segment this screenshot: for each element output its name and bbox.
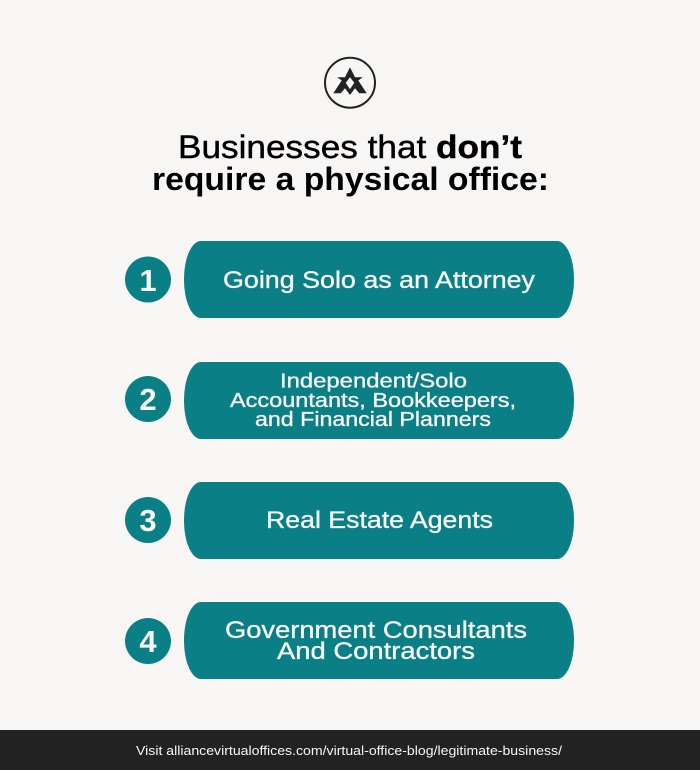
pill: item 2 [184, 362, 574, 439]
label: item 4 [225, 617, 527, 665]
title: require a physical office: [152, 161, 549, 197]
pill: item 1 [184, 241, 574, 318]
label: item 2: and Financial Planners [255, 409, 491, 431]
number badge 3 [125, 497, 171, 543]
number badge 2: 2 [139, 382, 157, 417]
number badge 4 [125, 618, 171, 664]
number badge 2 [125, 376, 171, 422]
label: item 1: Going Solo as an Attorney [223, 267, 535, 294]
label: item 4: Government Consultants [225, 617, 527, 644]
footer bar: Visit alliancevirtualoffices.com/virtual-office-blog/legitimate-business/ [136, 743, 562, 758]
pill: item 3 [184, 482, 574, 559]
number badge 1: 1 [139, 263, 157, 298]
pill: item 4 [184, 602, 574, 679]
label: item 4: And Contractors [277, 638, 475, 665]
icon: logo [325, 58, 375, 108]
label: item 2 [230, 370, 516, 431]
label: item 2: Independent/Solo [280, 370, 467, 392]
number badge 3: 3 [139, 503, 157, 538]
title [152, 129, 549, 197]
title: Businesses that don’t [178, 129, 522, 165]
number badge 1 [125, 256, 171, 302]
label: item 2: Accountants, Bookkeepers, [230, 390, 516, 412]
footer bar [0, 730, 700, 770]
label: item 3: Real Estate Agents [266, 507, 493, 534]
number badge 4: 4 [139, 624, 157, 659]
